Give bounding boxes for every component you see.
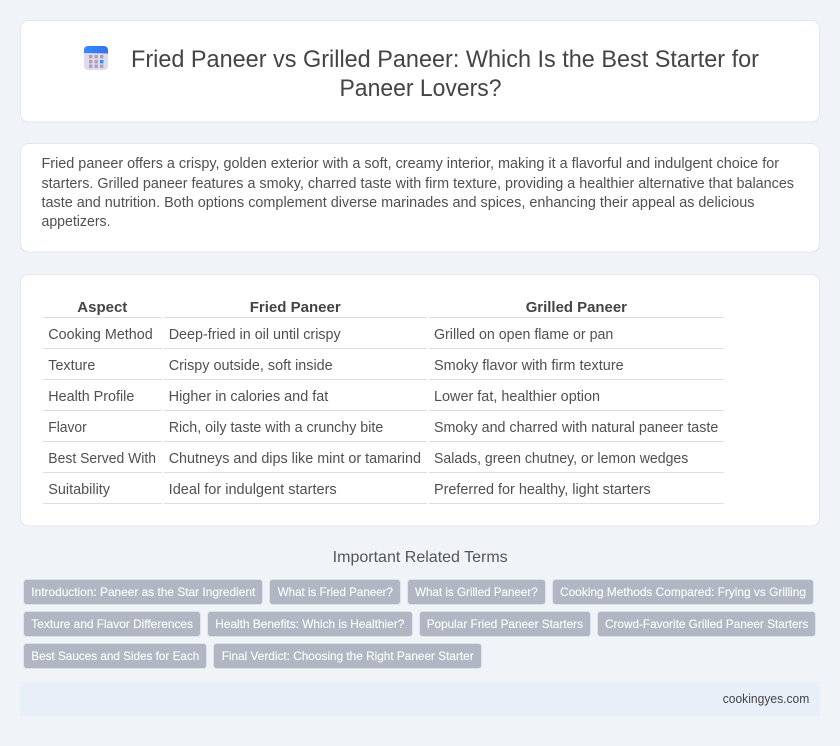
text block: introduction paragraph: appetizers. xyxy=(42,214,110,230)
title: Paneer Lovers? xyxy=(340,75,502,102)
table row: suitability xyxy=(48,482,651,498)
panel: comparison table xyxy=(20,274,820,526)
tag: Cooking Methods Compared: Frying vs Grilling xyxy=(560,585,806,599)
table row: best served with: Best Served With xyxy=(48,451,156,467)
table header row: Fried Paneer xyxy=(250,299,341,316)
tag xyxy=(24,580,262,604)
table row: texture: Texture xyxy=(48,358,95,374)
text block: introduction paragraph xyxy=(42,156,794,230)
tag xyxy=(24,644,206,668)
table header row xyxy=(77,299,627,316)
panel: related term tags xyxy=(24,580,816,668)
tag xyxy=(208,612,412,636)
tag xyxy=(24,612,200,636)
tag: Health Benefits: Which is Healthier? xyxy=(215,617,405,631)
table row: health profile: Lower fat, healthier option xyxy=(434,389,600,405)
text block: introduction paragraph: starters. Grilled paneer features a smoky, charred taste with firm texture, providing a healthier alternative that balances xyxy=(42,176,794,192)
title: Fried Paneer vs Grilled Paneer: Which Is the Best Starter for xyxy=(131,46,759,73)
table row: cooking method xyxy=(48,327,613,343)
tag: What is Fried Paneer? xyxy=(278,585,393,599)
table row: health profile: Health Profile xyxy=(48,389,134,405)
tag: Popular Fried Paneer Starters xyxy=(427,617,583,631)
table header row: Aspect xyxy=(77,299,127,316)
tag: What is Grilled Paneer? xyxy=(415,585,538,599)
icon: calendar xyxy=(84,46,108,70)
table row: flavor xyxy=(48,420,718,436)
footer xyxy=(20,682,820,716)
tag: Introduction: Paneer as the Star Ingredient xyxy=(31,585,256,599)
tag: Texture and Flavor Differences xyxy=(31,617,193,631)
table row: best served with: Salads, green chutney, or lemon wedges xyxy=(434,451,688,467)
tag xyxy=(214,644,482,668)
tag: Final Verdict: Choosing the Right Paneer Starter xyxy=(222,649,474,663)
tag: Crowd-Favorite Grilled Paneer Starters xyxy=(605,617,808,631)
table row: suitability: Preferred for healthy, light starters xyxy=(434,482,651,498)
table row: suitability: Suitability xyxy=(48,482,111,498)
table row: health profile xyxy=(48,389,600,405)
tag xyxy=(420,612,590,636)
table row: best served with xyxy=(48,451,688,467)
panel: title card xyxy=(20,20,820,122)
title xyxy=(131,46,759,102)
tag xyxy=(598,612,816,636)
table row: texture: Smoky flavor with firm texture xyxy=(434,358,624,374)
table row: texture xyxy=(48,358,624,374)
tag xyxy=(552,580,814,604)
heading: related terms: Important Related Terms xyxy=(333,549,508,566)
panel: introduction xyxy=(20,144,820,252)
table row: flavor: Flavor xyxy=(48,420,87,436)
table row: texture: Crispy outside, soft inside xyxy=(169,358,333,374)
text block: introduction paragraph: Fried paneer offers a crispy, golden exterior with a soft, creamy interior, making it a flavorful and indulgent choice for xyxy=(42,156,779,172)
table row: health profile: Higher in calories and fat xyxy=(169,389,328,405)
table row: suitability: Ideal for indulgent starters xyxy=(169,482,337,498)
table row: flavor: Rich, oily taste with a crunchy bite xyxy=(169,420,383,436)
table row: best served with: Chutneys and dips like mint or tamarind xyxy=(169,451,421,467)
table row: cooking method: Grilled on open flame or pan xyxy=(434,327,613,343)
tag xyxy=(408,580,546,604)
text block: introduction paragraph: taste and nutrition. Both options complement diverse marinades and spices, enhancing their appeal as delicious xyxy=(42,195,754,211)
table row: cooking method: Cooking Method xyxy=(48,327,153,343)
table header row: Grilled Paneer xyxy=(526,299,627,316)
table row: cooking method: Deep-fried in oil until crispy xyxy=(169,327,341,343)
tag: Best Sauces and Sides for Each xyxy=(31,649,199,663)
footer source text: cookingyes.com xyxy=(723,691,809,706)
table row: flavor: Smoky and charred with natural paneer taste xyxy=(434,420,718,436)
tag xyxy=(270,580,400,604)
